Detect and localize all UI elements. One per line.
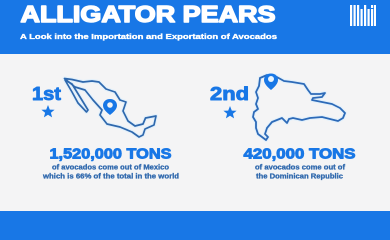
icon: star first [41,105,55,117]
icon: star second [223,106,237,118]
text: Mexico description: of avocados come out of Mexico [52,164,169,172]
rank: 2nd: 2nd [210,83,249,104]
title: ALLIGATOR PEARS [20,1,276,27]
text: Dominican Republic description [255,164,346,180]
header band [0,0,390,54]
text: Dominican Republic description: the Dominican Republic [256,174,343,180]
map: Mexico [64,78,156,137]
text: Mexico description: which is 66% of the total in the world [42,174,179,180]
map: Dominican Republic [253,75,345,140]
stat: Mexico tons: 1,520,000 TONS [50,146,172,162]
text: Mexico description [42,164,179,180]
stat: Dominican Republic tons: 420,000 TONS [244,146,356,162]
subtitle: A Look into the Importation and Exportation of Avocados [20,32,277,41]
icon: Dominican Republic location pin [264,74,278,90]
rank: 1st: 1st [32,83,61,104]
icon: Mexico location pin [103,99,117,115]
text: Dominican Republic description: of avocados come out of [255,164,346,172]
footer band [0,211,390,220]
logo icon [350,5,376,26]
